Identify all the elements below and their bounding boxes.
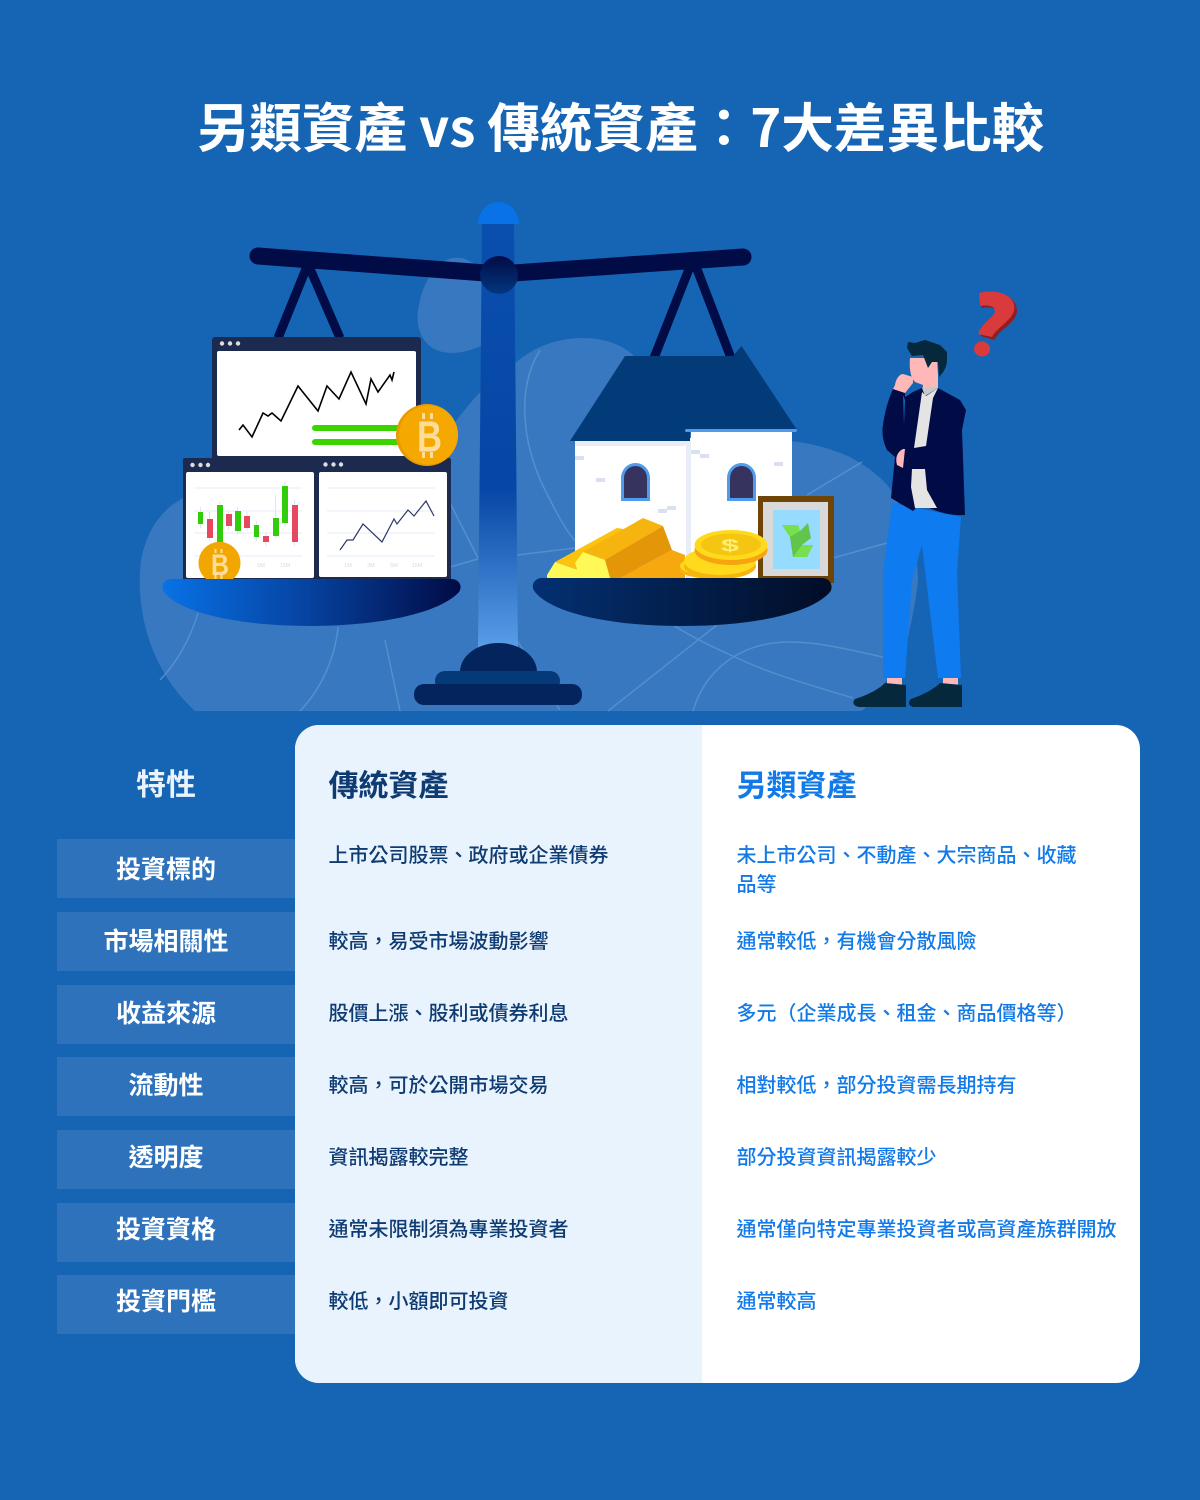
traditional: 透明度: 資訊揭露較完整 — [328, 1141, 468, 1170]
row label: 市場相關性 — [57, 912, 295, 971]
illustration: balance scale with assets and thinking man — [140, 202, 1017, 712]
icon: question mark — [974, 291, 1017, 356]
icon: candlestick window — [183, 458, 318, 583]
traditional: 流動性: 較高，可於公開市場交易 — [328, 1069, 548, 1098]
row label: 透明度: 透明度 — [128, 1138, 204, 1174]
icon: large bitcoin coin — [396, 404, 458, 466]
icon: candlestick window: 5M — [257, 563, 265, 569]
traditional: 投資門檻: 較低，小額即可投資 — [328, 1285, 508, 1314]
background blobs — [140, 258, 918, 711]
row label: 投資門檻 — [57, 1275, 295, 1334]
right scale pan — [533, 578, 832, 626]
row label: 投資標的: 投資標的 — [116, 850, 216, 886]
icon: large bitcoin coin: B — [417, 412, 442, 462]
icon: gold coins — [680, 530, 768, 579]
column heading: 傳統資產: 傳統資產 — [328, 760, 448, 804]
icon: line chart window: 15M — [412, 563, 423, 569]
row label: 投資門檻: 投資門檻 — [116, 1282, 216, 1318]
alternative: 收益來源: 多元（企業成長、租金、商品價格等） — [736, 997, 1076, 1026]
traditional: 投資標的: 上市公司股票、政府或企業債券 — [328, 839, 608, 868]
row label: 投資資格: 投資資格 — [116, 1210, 216, 1246]
row label: 投資標的 — [57, 839, 295, 898]
alternative: 投資標的 — [736, 839, 1076, 897]
alternative: 市場相關性: 通常較低，有機會分散風險 — [736, 925, 976, 954]
icon: gold bars — [547, 518, 685, 578]
comparison table panel — [295, 725, 1140, 1383]
icon: small bitcoin coin: B — [211, 549, 229, 582]
icon: candlestick window: 15M — [280, 563, 291, 569]
row heading: 特性: 特性 — [136, 760, 196, 804]
icon: framed painting — [758, 496, 834, 583]
icon: top chart window — [212, 337, 421, 462]
scale beam and hangers — [258, 256, 743, 358]
title: 另類資產 vs 傳統資產：7大差異比較 — [197, 86, 1044, 162]
row label: 收益來源 — [57, 984, 295, 1044]
left scale pan — [162, 579, 461, 626]
alternative: 透明度: 部分投資資訊揭露較少 — [736, 1141, 936, 1170]
traditional: 市場相關性: 較高，易受市場波動影響 — [328, 925, 548, 954]
row label: 收益來源: 收益來源 — [116, 994, 216, 1030]
row label: 流動性: 流動性 — [128, 1066, 204, 1102]
row label: 投資資格 — [57, 1202, 295, 1262]
icon: line chart window — [316, 458, 451, 583]
scale base — [414, 643, 582, 705]
traditional: 投資資格: 通常未限制須為專業投資者 — [328, 1213, 568, 1242]
alternative: 流動性: 相對較低，部分投資需長期持有 — [736, 1069, 1016, 1098]
icon: line chart window: 1M — [344, 563, 352, 569]
icon: gold coins: $ — [721, 537, 739, 555]
alternative: 投資標的: 品等 — [736, 868, 776, 897]
traditional: 收益來源: 股價上漲、股利或債券利息 — [328, 997, 568, 1026]
row label: 市場相關性: 市場相關性 — [103, 922, 228, 958]
row label: 流動性 — [57, 1057, 295, 1116]
alternative: 投資資格: 通常僅向特定專業投資者或高資產族群開放 — [736, 1213, 1116, 1242]
icon: line chart window: 5M — [390, 563, 398, 569]
row label: 透明度 — [57, 1130, 295, 1188]
alternative: 投資標的: 未上市公司、不動產、大宗商品、收藏 — [736, 839, 1076, 868]
column heading: 另類資產: 另類資產 — [736, 760, 856, 804]
alternative: 投資門檻: 通常較高 — [736, 1285, 816, 1314]
icon: house — [570, 346, 797, 583]
icon: thinking man — [853, 340, 966, 707]
icon: small bitcoin coin — [198, 542, 240, 582]
scale post — [478, 202, 519, 650]
icon: line chart window: 3M — [367, 563, 375, 569]
